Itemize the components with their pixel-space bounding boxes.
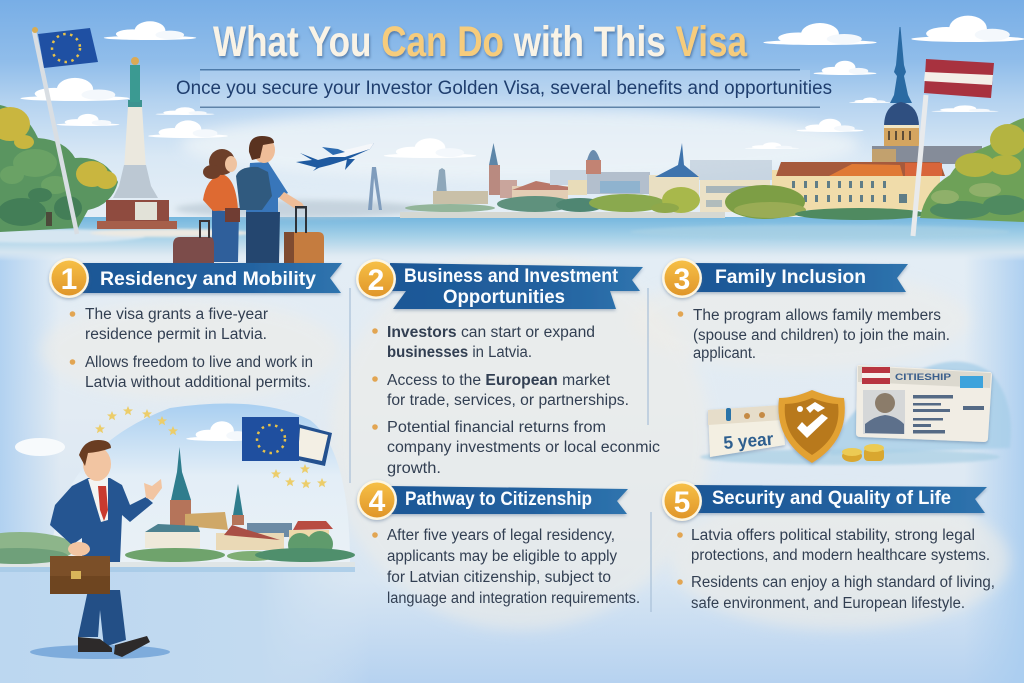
- number badge 3: [662, 258, 702, 298]
- banner 2: Opportunities: [443, 287, 565, 308]
- bullets 4: After five years of legal residency,: [387, 527, 615, 544]
- subtitle band: Once you secure your Investor Golden Visa, several benefits and opportunities: [176, 78, 832, 99]
- tree right: [920, 118, 1024, 222]
- banner 5: Security and Quality of Life: [712, 488, 951, 509]
- bullets 1: Latvia without additional permits.: [85, 374, 311, 391]
- bullets 2: businesses in Latvia.: [387, 344, 532, 361]
- bullets 2: [372, 324, 660, 477]
- tree left: [0, 105, 118, 232]
- number badge 1: [49, 258, 89, 298]
- flag: EU: [32, 27, 98, 234]
- flag: Latvia: [913, 59, 994, 236]
- bullets 1: residence permit in Latvia.: [85, 326, 267, 343]
- bullets 5: Latvia offers political stability, strong legal: [691, 527, 975, 544]
- number badge 4: 4: [369, 485, 386, 518]
- calendar: 5 year: [723, 429, 774, 453]
- coins: [842, 444, 884, 462]
- number badge 5: 5: [674, 486, 690, 519]
- bullets 3: (spouse and children) to join the main.: [693, 327, 950, 344]
- shoreline trees: [400, 185, 925, 220]
- banner 3: Family Inclusion: [715, 267, 866, 288]
- banner 5: [690, 485, 987, 513]
- bullets 4: [372, 527, 640, 607]
- banner 4: [390, 486, 628, 514]
- citizenship card: CITIESHIP: [895, 372, 952, 383]
- bullets 4: language and integration requirements.: [387, 590, 640, 607]
- bullets 1: [70, 306, 313, 391]
- bullets 2: Potential financial returns from: [387, 419, 606, 436]
- bullets 4: for Latvian citizenship, subject to: [387, 569, 611, 586]
- number badge 2: [356, 259, 396, 299]
- panel: illustration businessman: [0, 404, 370, 683]
- bullets 5: safe environment, and European lifestyle.: [691, 595, 965, 612]
- section 3: Family Inclusion: [662, 258, 950, 362]
- subtitle band: [176, 69, 832, 108]
- distant skyline: [175, 143, 772, 218]
- section 5: Security and Quality of Life: [662, 481, 995, 612]
- panel: family inclusion illustration: [700, 361, 1011, 465]
- woman: [203, 149, 240, 262]
- EU book: [242, 417, 332, 466]
- banner 2: [390, 263, 643, 309]
- scene backdrop: [0, 404, 370, 683]
- businessman: [30, 440, 170, 659]
- title: What You Can Do with This Visa: [213, 18, 748, 66]
- couple with suitcases: [173, 136, 324, 263]
- water: [0, 217, 1024, 261]
- bullets 2: for trade, services, or partnerships.: [387, 392, 629, 409]
- backdrop: [700, 361, 1011, 465]
- gold shield: [778, 390, 845, 463]
- number badge 2: 2: [368, 264, 384, 297]
- section 4: Pathway to Citizenship: [357, 480, 640, 607]
- banner 1: Residency and Mobility: [100, 269, 316, 290]
- bullets 2: Access to the European market: [387, 372, 611, 389]
- banner 2: Business and Investment: [404, 266, 619, 287]
- number badge 3: 3: [674, 263, 690, 296]
- citizenship card: [856, 365, 992, 442]
- bullets 5: Residents can enjoy a high standard of living,: [691, 574, 995, 591]
- bullets 2: Investors can start or expand: [387, 324, 595, 341]
- number badge 5: [662, 481, 702, 521]
- banner 1: [80, 263, 342, 293]
- clouds: [20, 16, 1024, 158]
- bullets 4: applicants may be eligible to apply: [387, 548, 617, 565]
- man: [236, 136, 305, 263]
- number badge 1: 1: [61, 263, 77, 296]
- bullets 3: [678, 307, 950, 362]
- bullets 3: applicant.: [693, 345, 756, 362]
- bullets 2: company investments or local econmic: [387, 439, 660, 456]
- bullets 1: Allows freedom to live and work in: [85, 354, 313, 371]
- town: [0, 447, 355, 564]
- banner 4: Pathway to Citizenship: [405, 489, 592, 510]
- monument: Freedom Monument: [97, 57, 177, 229]
- suitcase: orange: [284, 206, 324, 263]
- bullets 5: protections, and modern healthcare systems.: [691, 547, 990, 564]
- banner 3: [690, 263, 908, 292]
- suitcase: brown: [173, 220, 214, 263]
- cathedral and yellow building: [772, 27, 982, 210]
- section 1: Residency and Mobility: [49, 258, 342, 391]
- bullets 1: The visa grants a five-year: [85, 306, 268, 323]
- airplane: [296, 143, 374, 171]
- bullets 3: The program allows family members: [693, 307, 941, 324]
- bullets 5: [677, 527, 995, 612]
- calendar: [708, 405, 785, 457]
- section 2: Business and Investment Opportunities: [356, 259, 660, 477]
- number badge 4: [357, 480, 397, 520]
- section dividers: [350, 288, 651, 612]
- bullets 2: growth.: [387, 460, 441, 477]
- stars: [95, 406, 327, 488]
